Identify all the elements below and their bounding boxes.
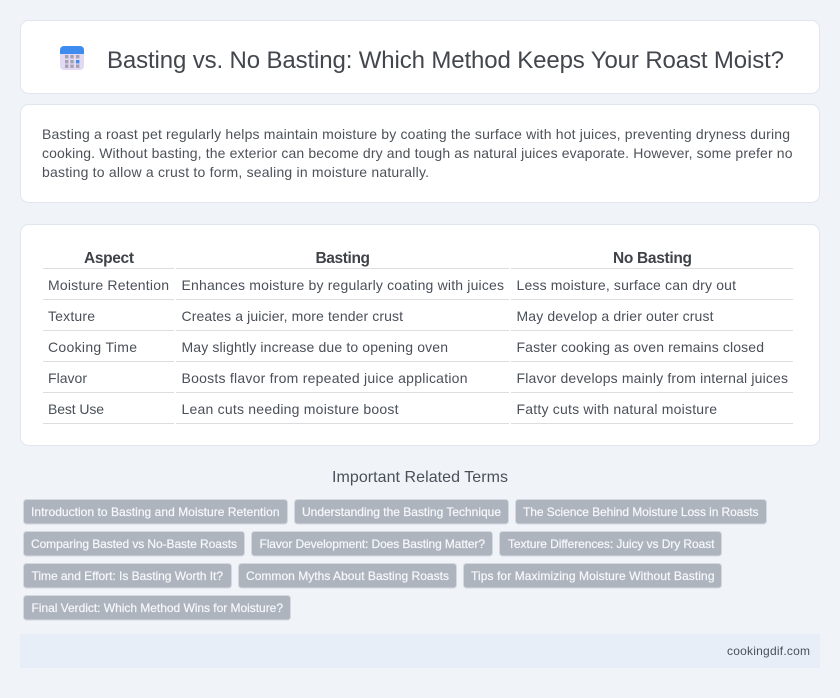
chip: comparing: Comparing Basted vs No-Baste Roasts bbox=[31, 537, 237, 551]
chip: technique: Understanding the Basting Technique bbox=[302, 505, 501, 519]
chip: texture: Texture Differences: Juicy vs Dry Roast bbox=[508, 537, 715, 551]
intro paragraph bbox=[42, 126, 793, 180]
row: cooking time bbox=[43, 339, 793, 362]
row: best use bbox=[43, 401, 793, 424]
chip: myths bbox=[238, 564, 456, 588]
chip: introduction: Introduction to Basting and Moisture Retention bbox=[31, 505, 280, 519]
chip: tips: Tips for Maximizing Moisture Without Basting bbox=[471, 569, 714, 583]
chip: myths: Common Myths About Basting Roasts bbox=[246, 569, 449, 583]
row: best use: Fatty cuts with natural moisture bbox=[516, 401, 717, 417]
chip: time and effort: Time and Effort: Is Basting Worth It? bbox=[32, 569, 223, 583]
chip: final verdict: Final Verdict: Which Method Wins for Moisture? bbox=[32, 601, 283, 615]
intro paragraph: Basting a roast pet regularly helps maintain moisture by coating the surface with hot juices, preventing dryness during bbox=[42, 126, 790, 142]
row: cooking time: May slightly increase due to opening oven bbox=[182, 339, 448, 355]
row: flavor bbox=[43, 370, 793, 393]
row: flavor: Flavor bbox=[48, 370, 87, 386]
row: moisture retention: Moisture Retention bbox=[48, 277, 169, 293]
chip: science bbox=[516, 500, 766, 524]
chip: time and effort bbox=[24, 564, 232, 588]
title: Basting vs. No Basting: Which Method Keeps Your Roast Moist? bbox=[107, 47, 784, 74]
source label: cookingdif.com bbox=[727, 644, 810, 658]
row: texture: Creates a juicier, more tender crust bbox=[182, 308, 403, 324]
chip: tips bbox=[464, 564, 722, 588]
table header: Aspect bbox=[84, 250, 134, 267]
row: best use: Lean cuts needing moisture boost bbox=[182, 401, 399, 417]
row: best use: Best Use bbox=[48, 401, 104, 417]
table header: No Basting bbox=[613, 250, 692, 267]
panel: title header bbox=[20, 20, 820, 94]
intro paragraph: basting to allow a crust to form, sealing in moisture naturally. bbox=[42, 164, 429, 180]
chip: technique bbox=[294, 500, 508, 524]
panel: comparison table bbox=[20, 224, 820, 446]
chip: introduction bbox=[24, 500, 288, 524]
chip: texture bbox=[500, 532, 722, 556]
table header bbox=[43, 250, 793, 269]
chip: science: The Science Behind Moisture Loss in Roasts bbox=[523, 505, 758, 519]
intro paragraph: cooking. Without basting, the exterior can become dry and tough as natural juices evaporate. However, some prefer no bbox=[42, 145, 793, 161]
row: cooking time: Cooking Time bbox=[48, 339, 137, 355]
icon: calendar bbox=[60, 46, 84, 70]
row: texture: May develop a drier outer crust bbox=[516, 308, 714, 324]
chip: flavor bbox=[252, 532, 492, 556]
chip: comparing bbox=[24, 532, 244, 556]
row: moisture retention: Less moisture, surface can dry out bbox=[516, 277, 736, 293]
table header: Basting bbox=[316, 250, 370, 267]
footer bbox=[20, 634, 820, 668]
row: flavor: Flavor develops mainly from internal juices bbox=[516, 370, 788, 386]
related terms chips bbox=[24, 500, 766, 620]
row: moisture retention bbox=[43, 277, 793, 300]
chip: flavor: Flavor Development: Does Basting Matter? bbox=[260, 537, 485, 551]
row: cooking time: Faster cooking as oven remains closed bbox=[516, 339, 764, 355]
panel: introduction bbox=[20, 104, 820, 202]
row: moisture retention: Enhances moisture by regularly coating with juices bbox=[182, 277, 504, 293]
row: flavor: Boosts flavor from repeated juice application bbox=[182, 370, 468, 386]
heading: important related terms: Important Related Terms bbox=[332, 469, 508, 486]
chip: final verdict bbox=[24, 596, 290, 620]
row: texture: Texture bbox=[48, 308, 95, 324]
row: texture bbox=[43, 308, 793, 331]
